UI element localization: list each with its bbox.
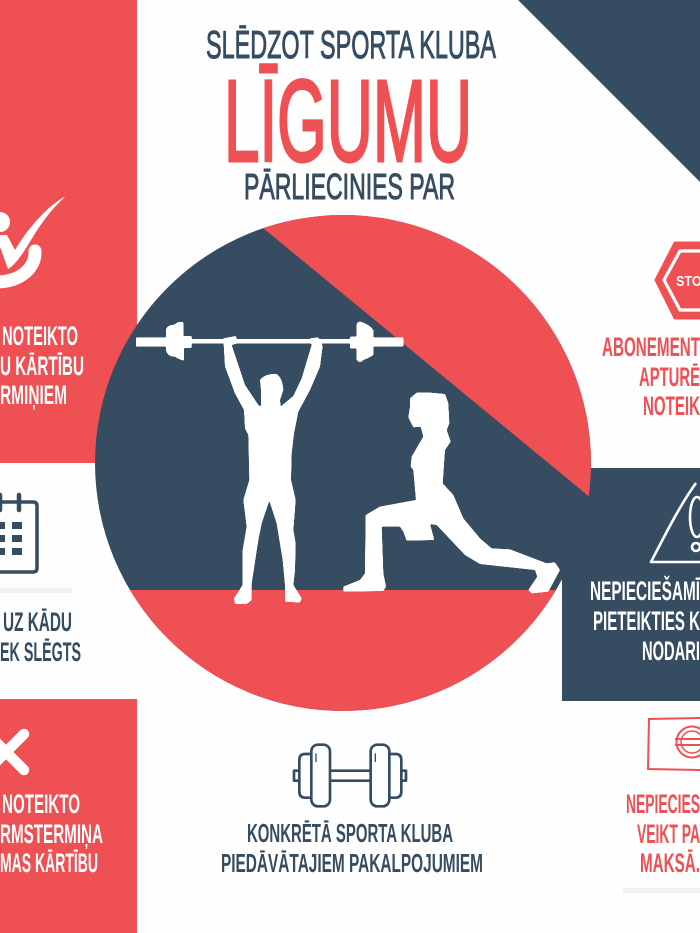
panel: stop item xyxy=(602,243,700,421)
icon: warning triangle xyxy=(651,483,700,562)
illustration: woman lunging xyxy=(343,393,560,593)
panel: payment item xyxy=(623,718,700,893)
text: services item: PIEDĀVĀTAJIEM PAKALPOJUMIEM xyxy=(221,848,483,878)
text: top left panel xyxy=(0,321,84,410)
text: services item: KONKRĒTĀ SPORTA KLUBA xyxy=(247,818,453,848)
icon: calendar xyxy=(0,495,37,572)
panel: bottom left red xyxy=(0,699,137,933)
icon: stop sign xyxy=(656,243,700,318)
text: bottom left panel: NOTEIKTO xyxy=(2,789,80,819)
panel: calendar item xyxy=(0,495,81,667)
panel: warning navy xyxy=(562,468,700,701)
text: calendar item: UZ KĀDU xyxy=(3,607,72,637)
text: calendar item: EK SLĒGTS xyxy=(0,637,81,667)
text: bottom left panel: RMSTERMIŅA xyxy=(0,819,103,849)
icon: dumbbell xyxy=(294,745,406,806)
text: top left panel: NOTEIKTO xyxy=(2,321,78,351)
title xyxy=(206,24,496,207)
text: payment item xyxy=(626,789,700,878)
title: LĪGUMU xyxy=(224,56,472,186)
icon: euro banknote xyxy=(648,718,700,770)
text: top left panel: RMIŅIEM xyxy=(0,380,67,410)
text: stop item xyxy=(602,332,700,421)
text: top left panel: U KĀRTĪBU xyxy=(0,351,84,381)
text: bottom left panel xyxy=(0,789,103,878)
title: PĀRLIECINIES PAR xyxy=(244,166,455,207)
text: services item xyxy=(221,818,483,878)
text: bottom left panel: MAS KĀRTĪBU xyxy=(0,848,98,878)
illustration: weightlifter xyxy=(136,322,403,604)
icon: cross xyxy=(0,732,24,772)
panel: top left red xyxy=(0,0,137,463)
chart circle xyxy=(95,215,591,711)
panel: services item xyxy=(221,745,483,878)
text: calendar item xyxy=(0,607,81,667)
icon: check mark with smile xyxy=(0,196,66,282)
title: SLĒDZOT SPORTA KLUBA xyxy=(206,24,496,67)
decorative navy triangle top right xyxy=(518,0,700,182)
text: warning panel xyxy=(590,575,700,666)
